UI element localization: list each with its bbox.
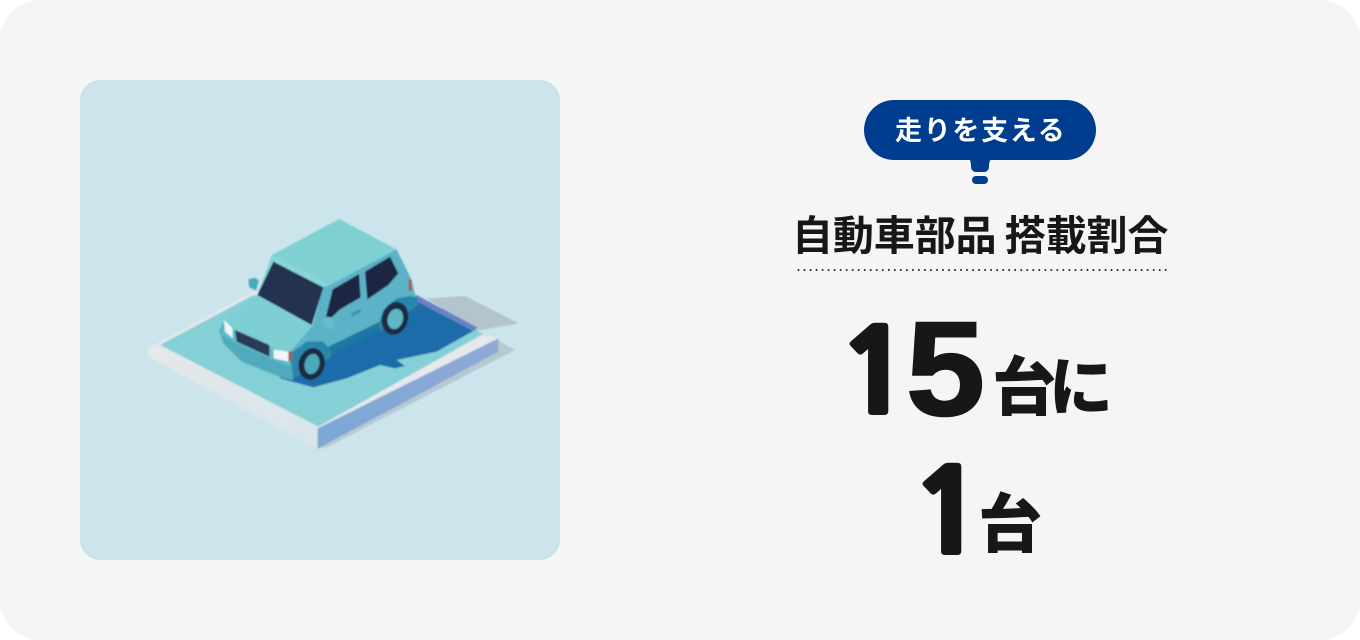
stat: 15台に: [838, 295, 1108, 444]
dotted divider: [798, 269, 1167, 271]
platform base: [148, 292, 498, 449]
number 5: 5: [906, 295, 985, 444]
mirrors: [248, 278, 259, 291]
bubble text: 走りを支える: [895, 109, 1066, 148]
hood: [223, 295, 312, 352]
wheels: [295, 345, 328, 383]
tail light: [409, 279, 412, 291]
speech bubble label: [864, 100, 1096, 184]
side window rear: [365, 257, 398, 299]
unit 台に: 台に: [992, 337, 1106, 429]
panel: illustration tile: [80, 80, 560, 560]
body side: [290, 249, 417, 378]
headlights: [224, 320, 233, 338]
number 1: 1: [910, 455, 986, 570]
stat: 1台: [910, 455, 1042, 570]
roof: [272, 219, 397, 285]
number 1: 1: [838, 315, 913, 430]
door handle: [351, 309, 361, 317]
bubble shape: [864, 100, 1096, 184]
grille: [235, 330, 269, 357]
windshield: [257, 262, 323, 325]
front wheel arch: [290, 342, 332, 378]
heading: 自動車部品 搭載割合: [792, 202, 1168, 262]
unit 台: 台: [978, 474, 1042, 566]
sill: [328, 322, 381, 356]
front bumper and face: [219, 322, 293, 380]
ground shadows: [318, 296, 519, 449]
rear wheel arch: [378, 296, 418, 332]
car shadow on platform: [280, 293, 475, 387]
side window front: [326, 274, 361, 317]
platform top: [160, 295, 483, 427]
A pillar frame: [257, 255, 330, 325]
car: [219, 219, 418, 383]
